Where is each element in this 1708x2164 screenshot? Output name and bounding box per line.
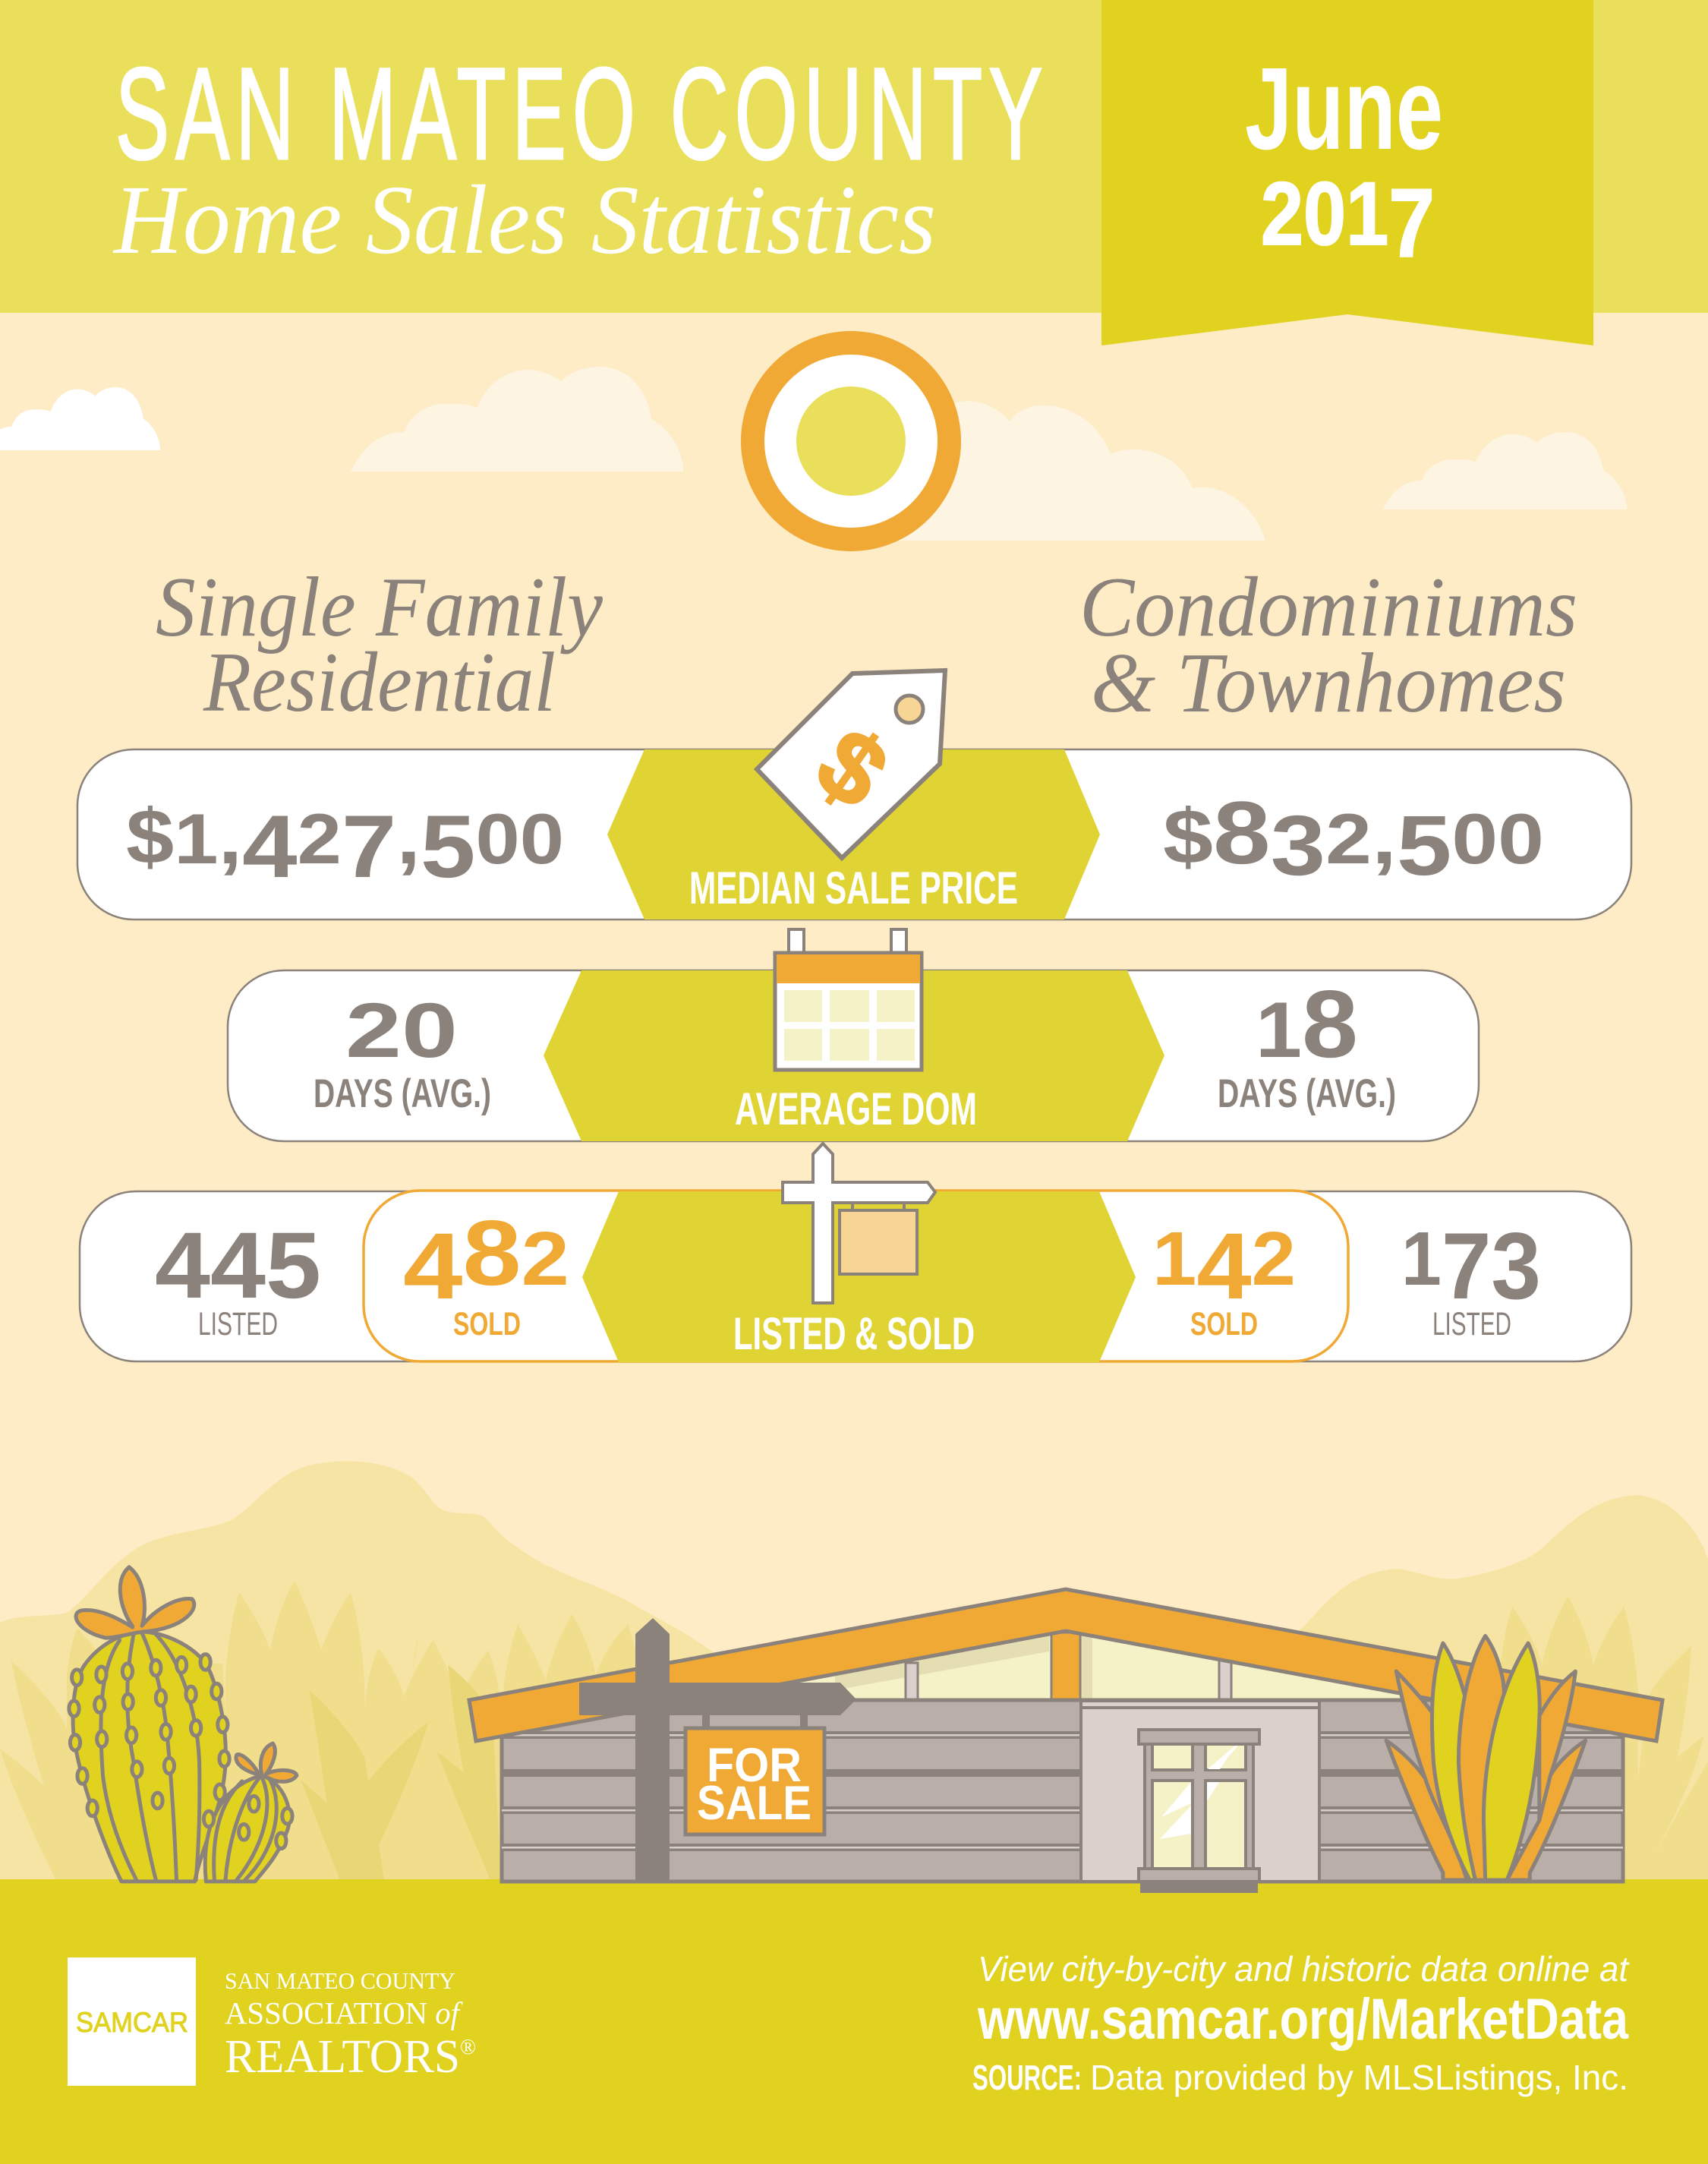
value: single family price: 7 — [342, 797, 396, 896]
label: days avg right: DAYS (AVG.) — [1218, 1071, 1396, 1116]
background: left mountain — [0, 1461, 752, 1883]
house: clerestory windows — [695, 1631, 1436, 1701]
value: 142 sold: 4 — [1196, 1214, 1252, 1319]
label: average dom: AVERAGE DOM — [735, 1084, 977, 1134]
heading: single family residential — [156, 560, 603, 730]
year: 201 — [1261, 164, 1410, 264]
sign text: for: FOR — [707, 1739, 802, 1792]
value: condo price: 2 — [1325, 799, 1372, 879]
value: condo price: , — [1372, 793, 1393, 880]
label: days avg left: DAYS (AVG.) — [314, 1071, 491, 1116]
house — [469, 1589, 1662, 1893]
value: condo price: 3 — [1271, 798, 1325, 893]
house: entry with window — [1081, 1701, 1319, 1893]
header band — [0, 0, 1708, 313]
icon: sun — [741, 331, 961, 551]
value: 173 listed: 1 — [1401, 1216, 1444, 1301]
text: source: Data provided by MLSListings, Inc. — [1090, 2058, 1628, 2097]
icon: cacti — [69, 1567, 297, 1882]
icon: for sale sign — [579, 1618, 856, 1882]
sign text: sale: SALE — [697, 1777, 811, 1830]
value: 20 days: 20 — [345, 987, 458, 1074]
cloud: far left — [0, 387, 160, 450]
label: sold right: SOLD — [1190, 1306, 1258, 1342]
panel: median sale price — [77, 670, 1631, 920]
logo: association name: SAN MATEO COUNTY — [225, 1967, 455, 1994]
value: single family price: , — [396, 793, 421, 880]
house: siding wall — [502, 1700, 1623, 1882]
text: source: SOURCE: — [972, 2058, 1082, 2097]
heading: condominiums and townhomes: Condominiums — [1079, 560, 1577, 655]
label: sold left: SOLD — [453, 1306, 521, 1342]
background: right mountain — [1290, 1495, 1708, 1883]
heading: condominiums and townhomes: & Townhomes — [1091, 636, 1566, 730]
heading: single family residential: Residential — [203, 636, 556, 730]
value: 482 sold: 8 — [462, 1201, 522, 1304]
icon: sign post — [783, 1144, 935, 1303]
label: listed right: LISTED — [1432, 1306, 1511, 1342]
footer band — [0, 1879, 1708, 2164]
label: listed and sold: LISTED & SOLD — [733, 1308, 975, 1359]
value: single family price: 00 — [475, 799, 564, 879]
value: single family price: 2 — [298, 799, 342, 879]
value: 482 sold: 2 — [522, 1216, 569, 1301]
logo: association name: ASSOCIATION of — [225, 1995, 464, 2030]
logo: association name: ® — [460, 2036, 476, 2059]
value: 142 sold: 1 — [1152, 1216, 1195, 1301]
background: left grasses — [0, 1582, 640, 1879]
heading: single family residential: Single Family — [156, 560, 603, 655]
value: single family price: 4 — [242, 797, 298, 896]
logo: association name: REALTORS — [225, 2031, 463, 2083]
cloud: behind sun — [896, 401, 1265, 541]
logo: samcar square — [68, 1957, 196, 2086]
value: 18 days: 18 — [1256, 970, 1358, 1077]
value: single family price: 5 — [421, 797, 475, 896]
value: 142 sold: 2 — [1252, 1216, 1296, 1301]
cloud: centre left — [351, 367, 683, 472]
value: condo price: $8 — [1163, 783, 1262, 882]
value: condo price: 00 — [1451, 799, 1544, 879]
icon: price tag: $ — [797, 706, 907, 830]
icon: calendar — [775, 929, 922, 1070]
year: 7 — [1388, 169, 1435, 278]
heading: condominiums and townhomes — [1079, 560, 1577, 730]
house: roof — [469, 1589, 1662, 1741]
icon: agave plant — [1386, 1636, 1586, 1880]
panel: listed and sold — [80, 1144, 1631, 1362]
value: 445 listed: 445 — [155, 1213, 321, 1318]
label: median sale price: MEDIAN SALE PRICE — [689, 863, 1018, 913]
logo: association name — [225, 1967, 476, 2083]
value: 482 sold: 4 — [403, 1214, 455, 1319]
icon: price tag — [757, 670, 945, 858]
logo: samcar square: SAMCAR — [76, 2007, 188, 2038]
label: listed left: LISTED — [198, 1306, 278, 1342]
panel: average dom — [228, 929, 1479, 1141]
value: condo price: 5 — [1397, 798, 1451, 893]
subtitle: Home Sales Statistics — [112, 166, 936, 275]
text: view online: View city-by-city and historic data online at — [978, 1949, 1630, 1989]
date ribbon — [1101, 0, 1593, 345]
cloud: right — [1383, 432, 1627, 509]
main title: SAN MATEO COUNTY — [115, 41, 1042, 187]
month: June — [1245, 43, 1443, 174]
background: right grasses — [1500, 1597, 1708, 1879]
value: 173 listed: 73 — [1442, 1214, 1541, 1319]
value: single family price: $1, — [126, 793, 240, 880]
